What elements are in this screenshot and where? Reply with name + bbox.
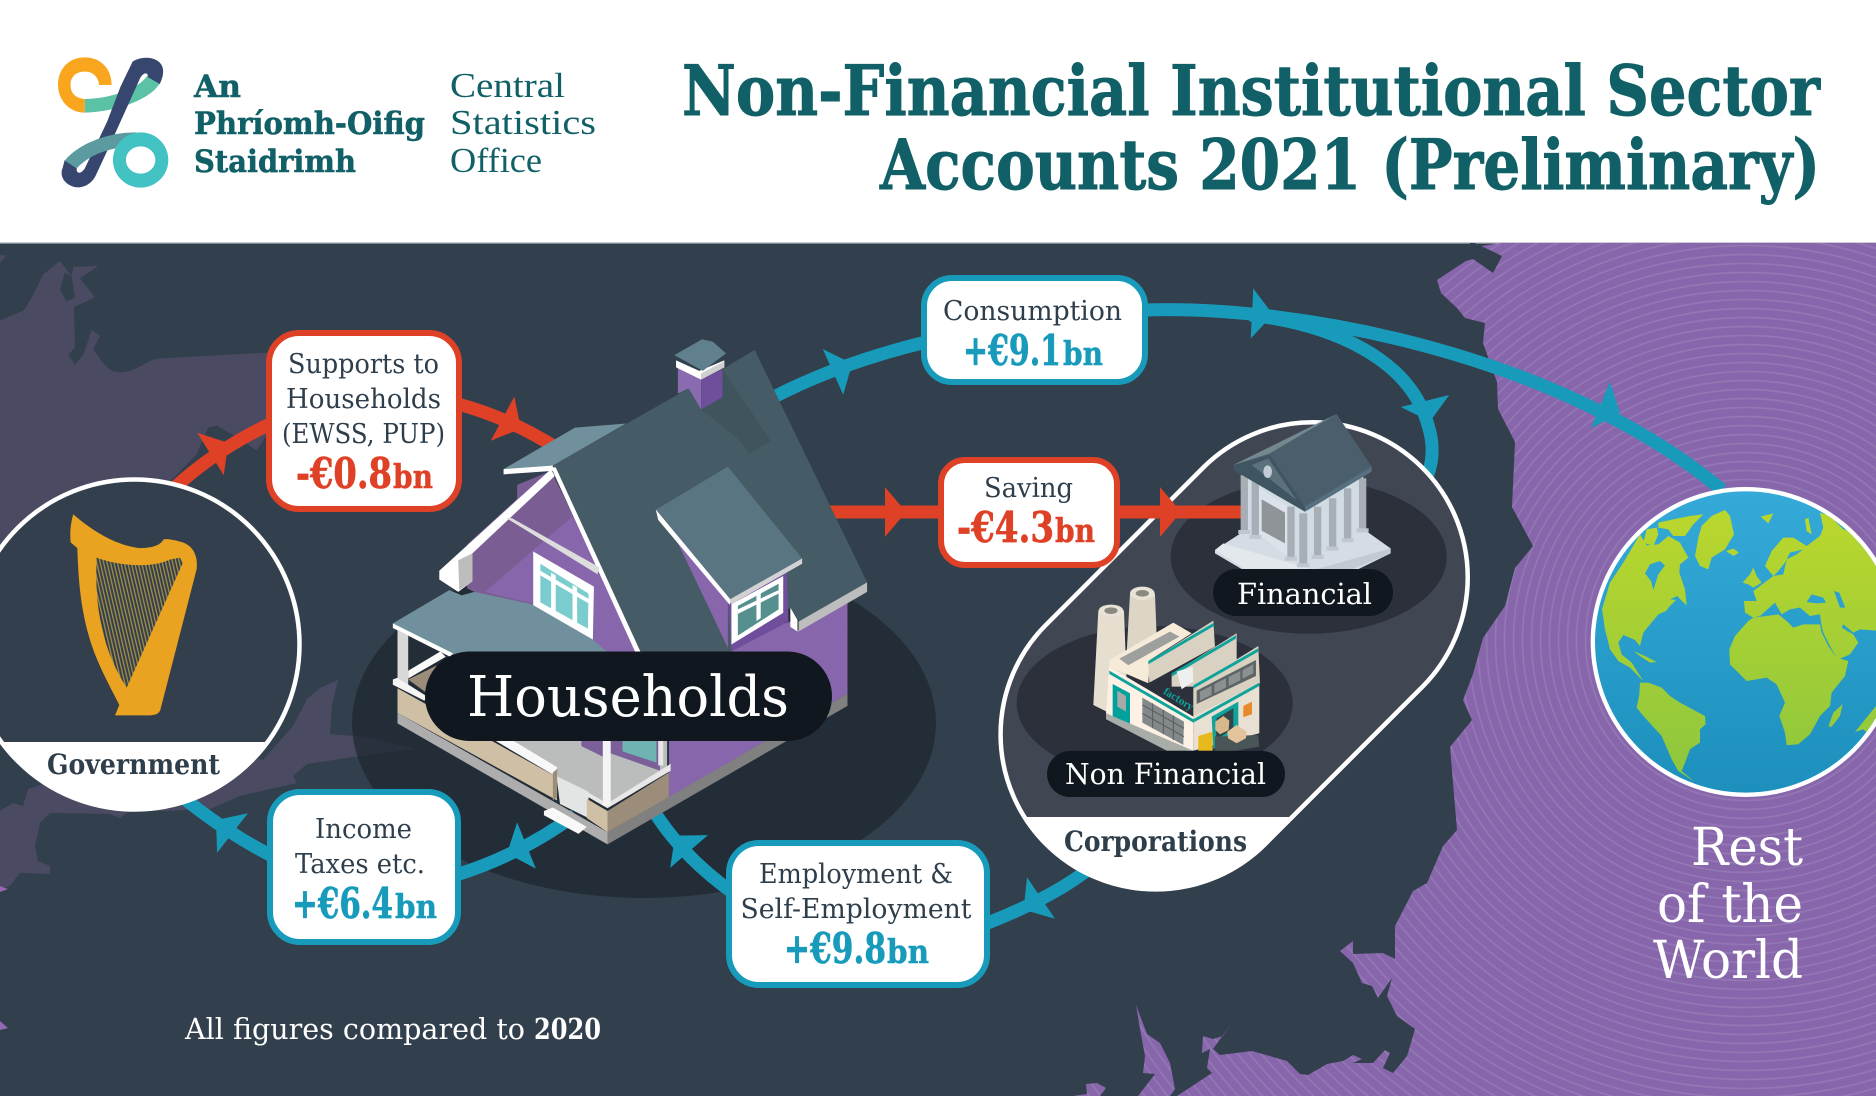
arrow: consumption to financial: [1250, 315, 1454, 492]
corporations label: Corporations: [1064, 825, 1247, 858]
callout: income taxes: +€6.4: [292, 879, 393, 928]
footnote: 2020: [534, 1012, 601, 1046]
callout: supports to households: (EWSS, PUP): [282, 419, 445, 450]
header background: [0, 0, 1876, 243]
panel: government: [0, 478, 302, 812]
callout: supports to households: bn: [393, 457, 433, 496]
flow arrows: red: [172, 397, 945, 537]
non financial shadow: [1017, 626, 1293, 780]
map: dim land left: [0, 255, 415, 889]
arrow: households to saving: [820, 487, 945, 537]
pill: households: Households: [467, 665, 789, 730]
callout: employment: +€9.8: [784, 924, 886, 973]
logo text: Irish: An: [193, 69, 241, 105]
label: rest of the world: Rest: [1691, 818, 1803, 878]
callout: employment: Employment &: [759, 859, 953, 890]
icon: globe: [1591, 487, 1876, 797]
porch roof: [393, 590, 606, 657]
bargeboard: [439, 469, 555, 592]
label: rest of the world: [1653, 818, 1803, 991]
porch posts: [397, 630, 408, 685]
foundation: [607, 694, 847, 844]
flow arrows: blue: [180, 289, 1722, 930]
cross bar: [506, 518, 599, 574]
callout: supports to households: Supports to: [288, 349, 439, 380]
callout: saving: [941, 460, 1117, 565]
footnote: All figures compared to: [184, 1012, 525, 1046]
callout: supports to households: [269, 333, 459, 509]
arrow: saving to financial: [1115, 487, 1245, 537]
arrow: government to supports: [172, 422, 270, 490]
arrow: households to consumption: [776, 341, 926, 396]
arrow: income taxes to government: [180, 795, 272, 856]
callout: consumption: +€9.1: [963, 326, 1061, 375]
map: purple land, rest of the world: [1073, 243, 1876, 1096]
callout: income taxes: [270, 792, 458, 942]
financial shadow: [1171, 480, 1447, 634]
arrow: employment to households: [650, 805, 732, 892]
callout: consumption: bn: [1063, 334, 1103, 373]
icon: harp: [70, 514, 197, 715]
callout: consumption: [924, 278, 1145, 382]
callout: saving: -€4.3: [957, 503, 1054, 552]
label: rest of the world: World: [1653, 931, 1803, 991]
callout: employment: [729, 843, 987, 985]
icon: bank building: [1215, 414, 1391, 570]
pill: non financial: [1047, 751, 1285, 797]
government label: Government: [47, 748, 220, 781]
dark map background: [0, 243, 1876, 1096]
callout: saving: Saving: [984, 473, 1073, 504]
eaves: [790, 608, 797, 631]
logo text: English: Office: [450, 141, 542, 180]
callout: income taxes: bn: [395, 887, 437, 926]
callout: income taxes: Income: [315, 814, 412, 845]
households shadow: [352, 548, 936, 898]
icon: factory: factory: [1161, 687, 1195, 714]
upper eave: [504, 423, 626, 469]
arrow: consumption to rest of the world: [1145, 289, 1722, 490]
arrow: corporations to employment: [985, 860, 1100, 930]
icon: house: [393, 339, 867, 844]
dormer: [676, 539, 728, 648]
logo text: English: [450, 66, 596, 180]
panel: corporations: [1001, 422, 1468, 889]
walls: [646, 602, 847, 797]
gable window: [533, 551, 594, 640]
logo text: Irish: Staidrimh: [194, 144, 356, 180]
pill: non financial: Non Financial: [1065, 757, 1266, 791]
arrow: households to income taxes: [456, 815, 575, 877]
logo text: Irish: Phríomh-Oifig: [194, 106, 425, 142]
callout: consumption: Consumption: [943, 296, 1122, 327]
gable wall: [467, 471, 640, 651]
icon: factory: [1093, 587, 1260, 751]
government circle: [0, 480, 300, 810]
arrow: supports to households: [458, 397, 560, 451]
callout: supports to households: Households: [286, 384, 441, 415]
callout: income taxes: Taxes etc.: [295, 849, 425, 880]
logo: [58, 57, 596, 188]
callout: saving: bn: [1055, 511, 1095, 550]
title: [682, 51, 1821, 206]
logo text: Irish: [193, 69, 425, 180]
label: rest of the world: of the: [1657, 875, 1803, 935]
map: purple specks: [0, 886, 8, 1030]
map: dark island: [1462, 243, 1502, 273]
pill: financial: [1213, 569, 1393, 616]
logo text: English: Statistics: [450, 103, 596, 142]
pill: financial: Financial: [1237, 577, 1372, 611]
corporations capsule: [1001, 422, 1468, 889]
pill: households: [425, 652, 832, 741]
logo text: English: Central: [450, 66, 565, 105]
chimney: [678, 362, 701, 409]
callout: supports to households: -€0.8: [296, 449, 392, 498]
main roof: [553, 350, 867, 651]
callout: employment: Self-Employment: [740, 894, 972, 925]
logo mark: [58, 57, 168, 188]
callout: employment: bn: [887, 932, 929, 971]
